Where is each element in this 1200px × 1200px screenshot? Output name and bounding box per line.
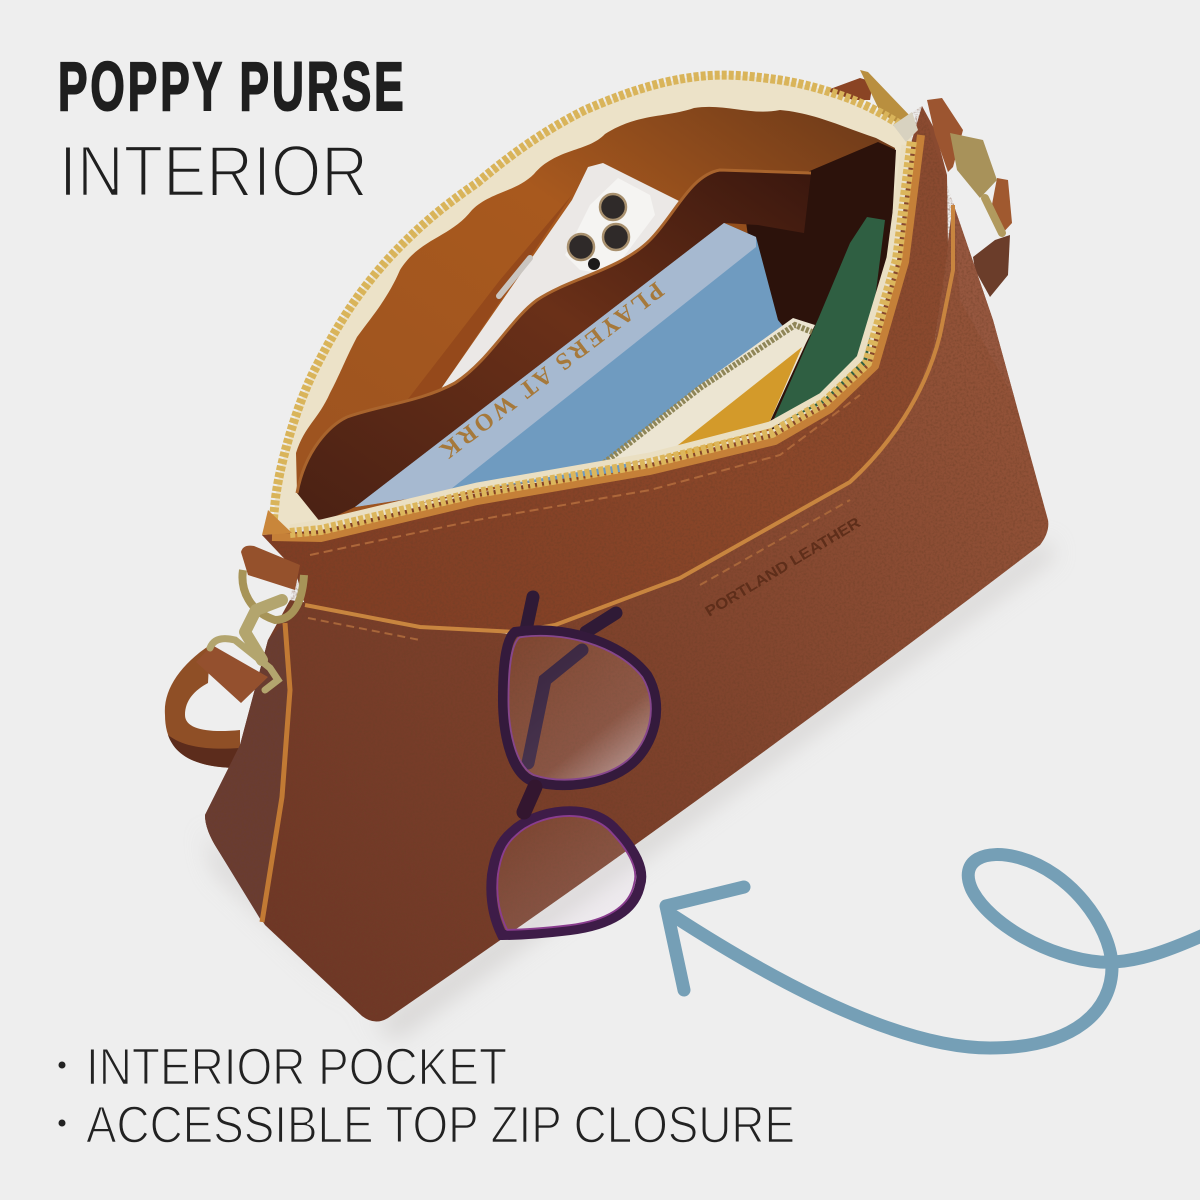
phone body: [438, 163, 683, 393]
right strap tab: [927, 98, 963, 172]
wallet zipper: [604, 325, 812, 463]
phone side button: [499, 258, 530, 296]
left strap loop: [165, 645, 240, 768]
brand stamp: PORTLAND LEATHER: [702, 514, 864, 620]
zipper teeth arc: [272, 75, 912, 533]
pocket top edge: [297, 170, 811, 493]
subheading: interior: INTERIOR: [59, 132, 368, 212]
left brass clasp: [245, 600, 282, 660]
pocket stitching: [308, 500, 850, 640]
zip pull leather tab: [822, 78, 873, 100]
phone: [405, 163, 683, 403]
upper front panel: [262, 106, 948, 632]
book title: PLAYERS AT WORK: [434, 276, 668, 464]
leather grain: [205, 106, 1048, 1022]
front pocket edge: [305, 205, 953, 632]
bullet: interior pocket: INTERIOR POCKET: [86, 1038, 507, 1096]
phone lenses: [600, 194, 626, 220]
left keeper ring: [210, 639, 278, 690]
interior: suede lining: [296, 107, 895, 522]
feature list: [58, 1038, 795, 1154]
main lower body: [205, 203, 1048, 1022]
front tape strip: [290, 145, 905, 528]
heading: product name: POPPY PURSE: [58, 49, 404, 125]
zip pull: [860, 70, 912, 132]
interior: zip tape: [272, 75, 912, 530]
wallet body: [598, 318, 815, 467]
upper lens inner rim: [508, 636, 651, 780]
glasses: [491, 597, 656, 935]
left strap tab: [241, 546, 300, 590]
side seam: [262, 623, 290, 922]
right side panel: [953, 203, 1015, 400]
right brass clasp: [950, 133, 1002, 233]
zip slider: [893, 112, 918, 142]
left strap underside: [168, 735, 240, 768]
zipper teeth front: [290, 140, 912, 533]
lower lens inner rim: [497, 816, 635, 930]
bag shadow: [205, 540, 1055, 1040]
arrow head: [666, 887, 744, 990]
blue book: [355, 223, 790, 507]
bullet: top zip closure: ACCESSIBLE TOP ZIP CLOSURE: [86, 1096, 795, 1154]
clasp body: [950, 133, 997, 198]
purse illustration: [165, 70, 1048, 1022]
side panel: [205, 622, 290, 922]
interior pocket: [297, 170, 811, 523]
left brass ring: [242, 570, 304, 620]
phone camera module: [565, 178, 655, 275]
title: [58, 49, 404, 212]
right lower tab: [990, 178, 1012, 236]
arrow: [666, 855, 1200, 1048]
front zip leather binding: [272, 135, 921, 538]
phone slot strip: [405, 195, 572, 403]
book cover: [355, 223, 790, 507]
stitching on panel: [310, 395, 860, 555]
clasp shank: [985, 198, 1002, 233]
temple arms: [526, 597, 616, 763]
left zip end tab: [262, 510, 292, 535]
lower lens: [491, 811, 641, 935]
wallet: [598, 318, 815, 467]
book spine: [355, 223, 756, 507]
arrow curve with loop: [672, 855, 1200, 1048]
upper lens: [503, 630, 656, 785]
bridge: [524, 787, 535, 812]
green book: [770, 217, 885, 428]
left leather keeper: [196, 645, 268, 703]
wallet yellow panel: [663, 347, 802, 457]
right strap: [973, 235, 1010, 297]
interior: dark cavity: [740, 142, 896, 430]
